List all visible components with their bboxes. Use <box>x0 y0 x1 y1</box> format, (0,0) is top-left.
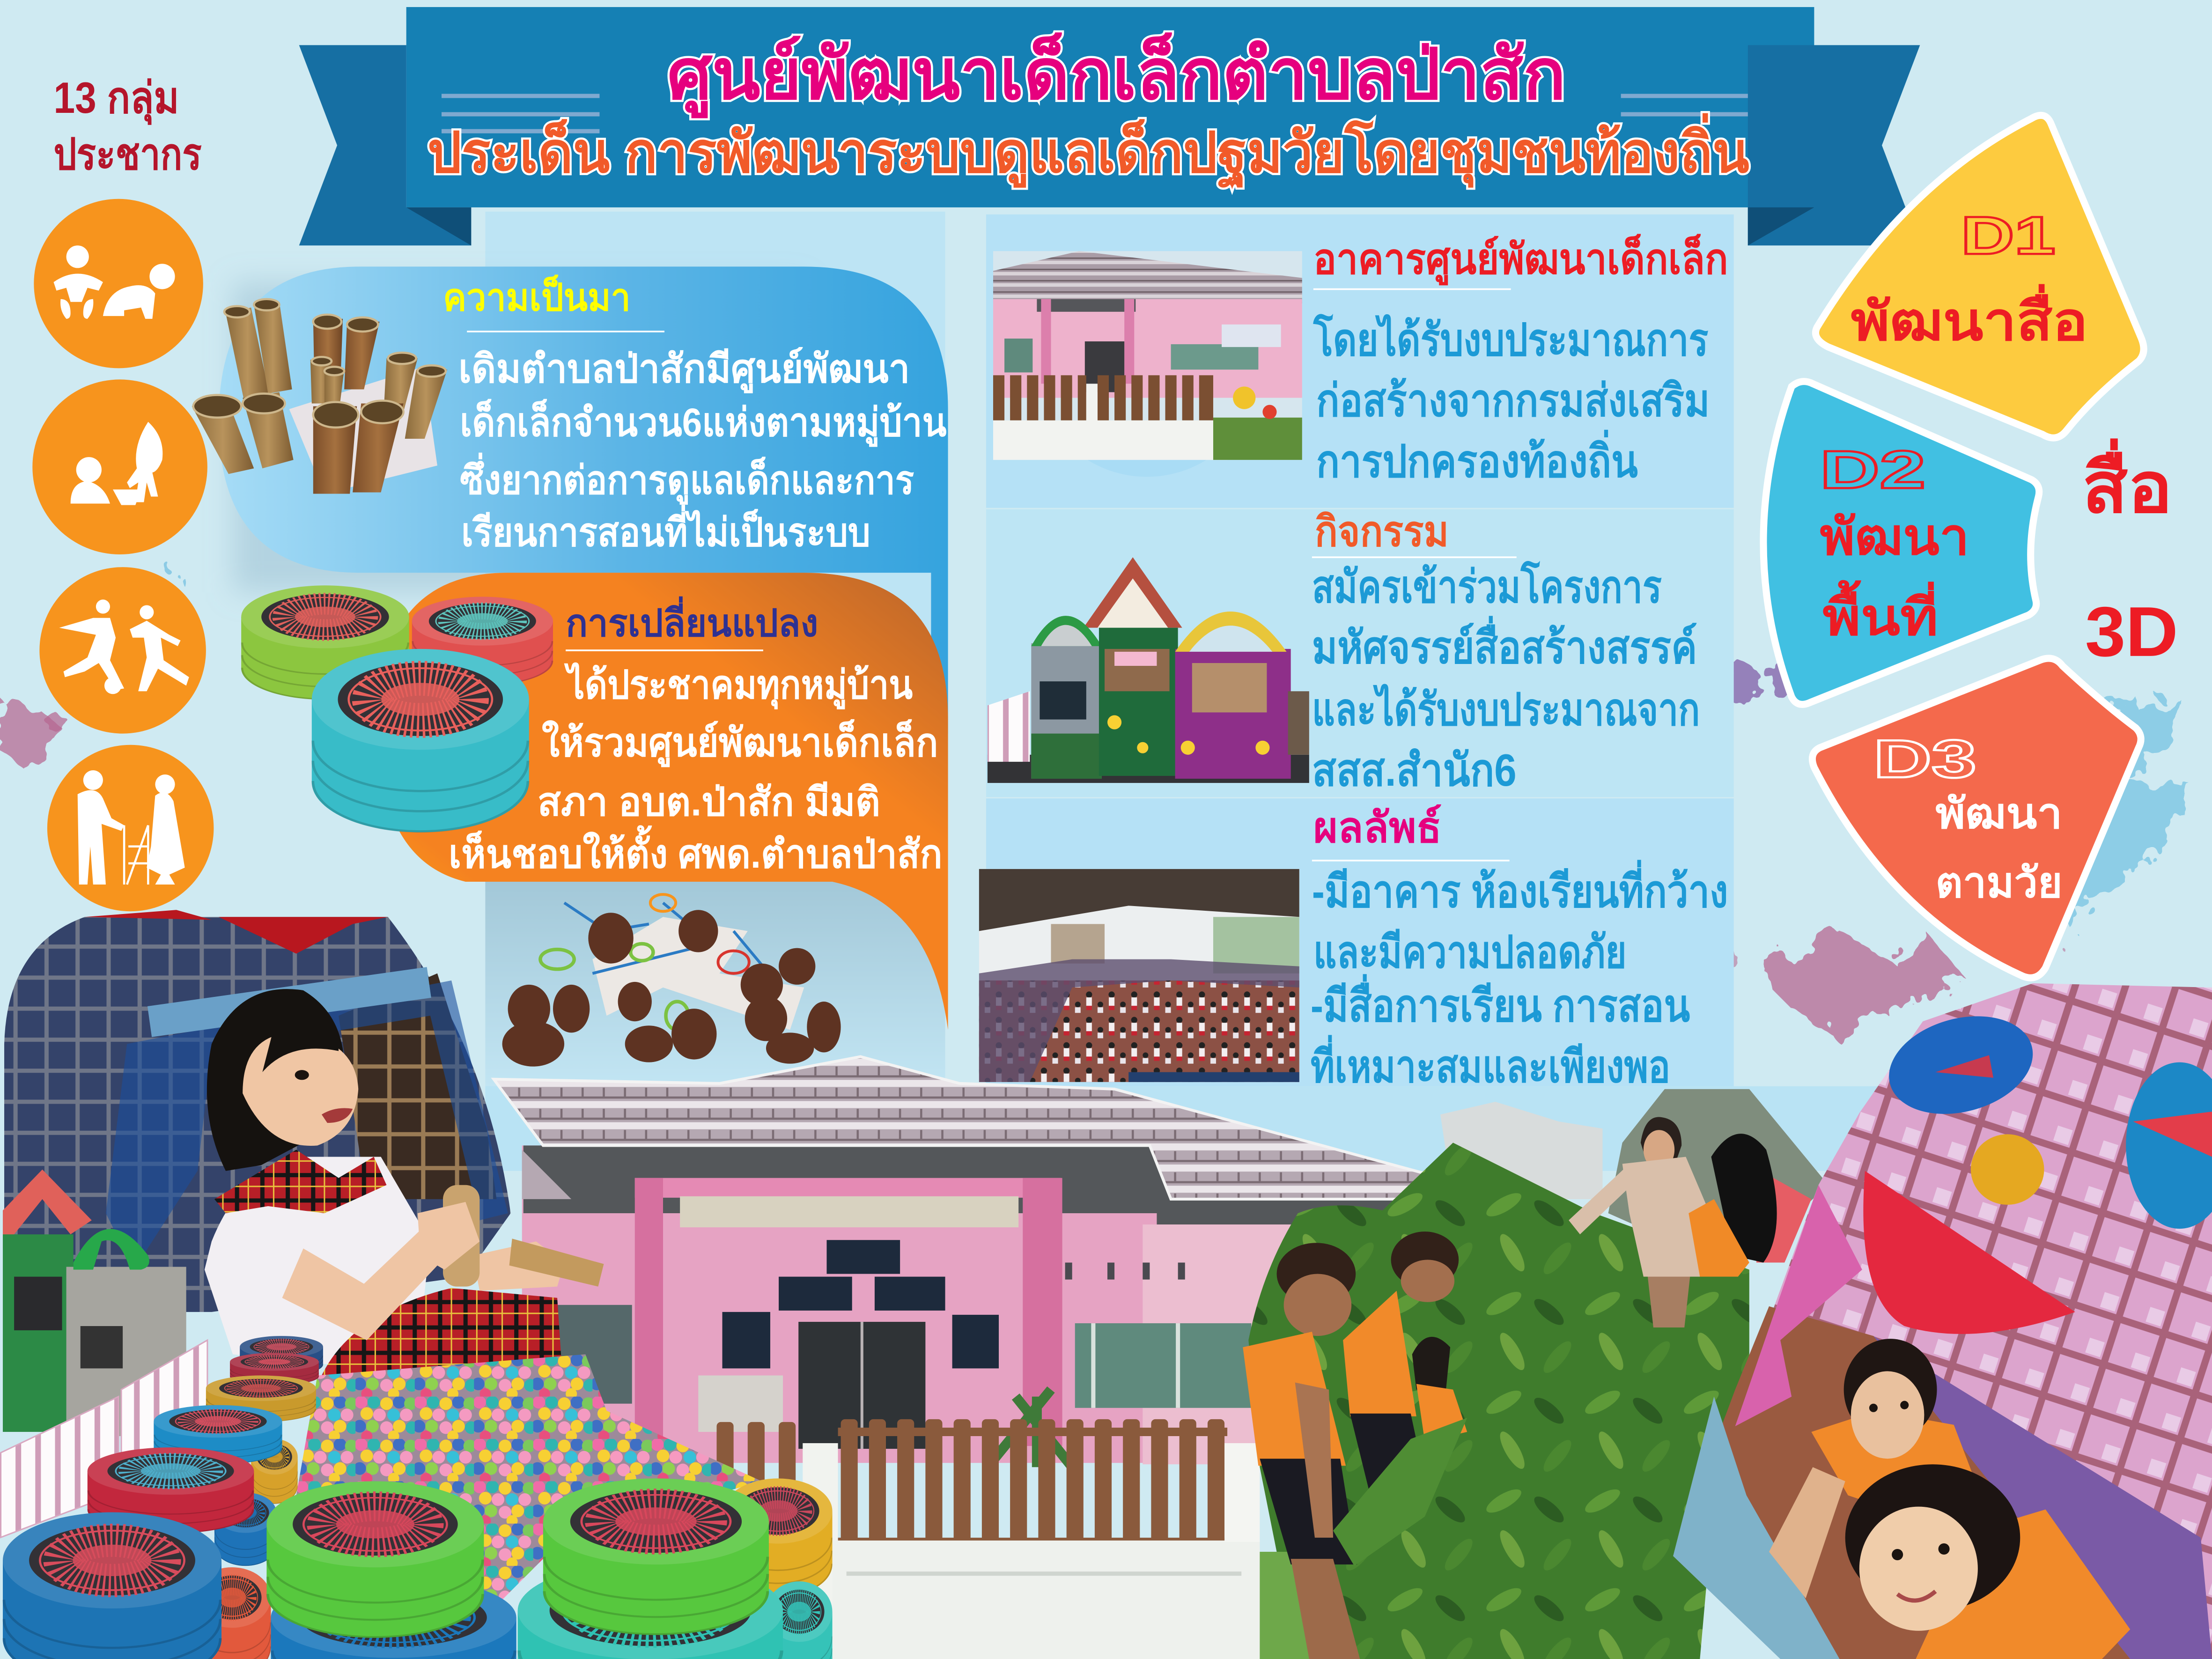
icon: toddlers <box>32 379 207 554</box>
text: results: -มีอาคาร ห้องเรียนที่กว้าง <box>1312 860 1728 917</box>
text: activities: และได้รับงบประมาณจาก <box>1312 684 1700 735</box>
text: change: ให้รวมศูนย์พัฒนาเด็กเล็ก <box>542 718 938 767</box>
photo: play houses <box>3 1170 186 1436</box>
banner <box>299 7 1920 245</box>
D3 segment: D3 <box>1873 729 1976 789</box>
photo: children in hall <box>979 869 1299 1082</box>
fish eye right <box>2126 1062 2212 1229</box>
D2 segment <box>1763 382 2039 704</box>
heading: activities: กิจกรรม <box>1315 508 1449 555</box>
bamboo tubes <box>192 299 447 494</box>
heading: population groups <box>53 73 202 179</box>
wooden fence <box>716 1419 1227 1545</box>
tires group <box>3 1336 833 1659</box>
fish mouth <box>1863 1171 2075 1334</box>
ribbon left <box>299 45 471 245</box>
child one <box>1769 1339 1981 1598</box>
text: history: เรียนการสอนที่ไม่เป็นระบบ <box>461 505 870 554</box>
text: results: -มีสื่อการเรียน การสอน <box>1311 974 1690 1031</box>
icon: infants <box>34 199 203 368</box>
child with long hair <box>1688 1134 1811 1277</box>
strip behind collage <box>485 1086 1896 1171</box>
text: results <box>1311 860 1728 1092</box>
ball pit <box>296 1354 762 1608</box>
boys in orange <box>1243 1231 1467 1659</box>
D2 segment: พื้นที่ <box>1822 580 1939 646</box>
D1 segment: พัฒนาสื่อ <box>1851 284 2088 352</box>
label: 3D: 3D <box>2085 592 2178 671</box>
icon: children running <box>39 567 206 734</box>
D3 segment: พัฒนา <box>1935 790 2063 837</box>
D3 segment <box>1812 658 2141 978</box>
D1 segment <box>1815 115 2144 438</box>
text: change: ได้ประชาคมทุกหมู่บ้าน <box>564 662 913 709</box>
text: change <box>449 662 943 876</box>
heading: history: ความเป็นมา <box>443 274 631 319</box>
photo: building collage <box>494 1057 1467 1659</box>
text: activities: มหัศจรรย์สื่อสร้างสรรค์ <box>1312 616 1697 673</box>
teacher <box>1569 1117 1710 1327</box>
panel: change <box>241 573 948 1030</box>
photo: school building <box>993 251 1302 477</box>
ribbon right <box>1748 45 1920 245</box>
label: media: สื่อ <box>2082 438 2173 527</box>
panel: centre column backdrop <box>485 212 945 1100</box>
text: activities: สสส.สำนัก6 <box>1312 745 1517 796</box>
text: results: และมีความปลอดภัย <box>1313 928 1627 978</box>
girl <box>207 989 344 1171</box>
photo: seed toys <box>502 894 841 1067</box>
photo: girl in bamboo tent <box>4 910 604 1375</box>
D1 segment: D1 <box>1961 206 2056 265</box>
text: activities: สมัครเข้าร่วมโครงการ <box>1312 560 1662 612</box>
title: ศูนย์พัฒนาเด็กเล็กตำบลป่าสัก <box>667 32 1566 118</box>
heading: population groups: ประชากร <box>53 130 202 179</box>
heading: building: อาคารศูนย์พัฒนาเด็กเล็ก <box>1313 233 1728 285</box>
text: activities <box>1312 560 1700 796</box>
text: change: เห็นชอบให้ตั้ง ศพด.ตำบลป่าสัก <box>449 825 943 876</box>
panel: right column backdrop <box>986 214 1734 1086</box>
D2 segment: D2 <box>1820 440 1925 500</box>
tires <box>241 585 553 833</box>
text: history: เด็กเล็กจำนวน6แห่งตามหมู่บ้าน <box>460 398 947 447</box>
icon: elderly <box>47 745 214 911</box>
text: results: ที่เหมาะสมและเพียงพอ <box>1311 1035 1670 1092</box>
text: building: โดยได้รับงบประมาณการ <box>1313 314 1709 365</box>
D2 segment: พัฒนา <box>1820 509 1969 565</box>
white fence <box>0 1340 207 1538</box>
D3 segment: ตามวัย <box>1935 859 2063 907</box>
panel: history <box>192 266 948 734</box>
heading: change: การเปลี่ยนแปลง <box>566 596 818 645</box>
photo: media play houses <box>988 557 1309 783</box>
photo: fish net tent and children <box>1673 983 2212 1659</box>
child two <box>1845 1464 2130 1659</box>
text: building: ก่อสร้างจากกรมส่งเสริม <box>1316 376 1710 426</box>
photo: vegetable garden <box>1243 1089 1829 1659</box>
subtitle: ประเด็น การพัฒนาระบบดูแลเด็กปฐมวัยโดยชุมชนท้องถิ่น <box>428 113 1749 190</box>
heading: results: ผลลัพธ์ <box>1313 804 1442 852</box>
paint splashes <box>0 563 2190 1037</box>
fish eye left <box>1878 1001 2044 1129</box>
heading: population groups: 13 กลุ่ม <box>53 73 179 125</box>
text: history <box>458 347 947 554</box>
text: change: สภา อบต.ป่าสัก มีมติ <box>538 780 880 824</box>
text: history: ซึ่งยากต่อการดูแลเด็กและการ <box>460 452 914 505</box>
text: history: เดิมตำบลป่าสักมีศูนย์พัฒนา <box>458 347 910 393</box>
text: building <box>1313 314 1710 487</box>
text: building: การปกครองท้องถิ่น <box>1316 429 1638 487</box>
